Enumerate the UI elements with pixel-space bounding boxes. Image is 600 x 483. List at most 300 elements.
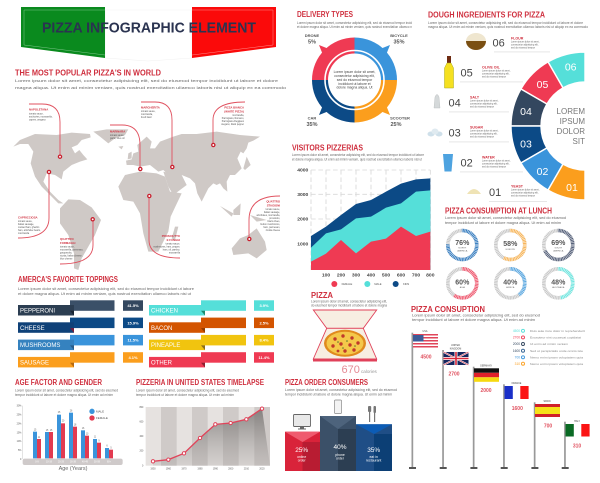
bar: other (149, 352, 274, 367)
ingredient: water: 02 (460, 158, 473, 170)
flag pole: france: FRANCE (512, 382, 522, 385)
legend (513, 329, 585, 366)
ingredient: yeast: sed do eiusmod tempor (511, 194, 535, 198)
bar chart: age: 13 (86, 433, 89, 435)
ingredient: water: consectetur adipisicing elit, (482, 162, 510, 166)
bar: sausage (18, 352, 143, 367)
line chart: timelapse: 1970 (181, 469, 187, 471)
callout: quattro formaggi: FORMAGGI (60, 241, 76, 245)
consumers text (285, 388, 397, 396)
ingredient: salt (434, 94, 509, 112)
area chart: visitors: 700 (412, 272, 420, 278)
area chart: visitors: FEMALE (342, 282, 353, 286)
consumption text (412, 314, 540, 322)
area chart: visitors: 400 (367, 272, 375, 278)
gauge: africa (496, 269, 525, 298)
gauge: australia (544, 269, 573, 298)
callout: capricciosa (18, 170, 51, 238)
ingredient: salt: Lorem ipsum dolor sit amet, (470, 100, 499, 102)
bar chart: age: 5 (110, 447, 112, 449)
bar: chicken: 3.9% (259, 303, 269, 308)
bar chart: age: 30% (17, 406, 21, 408)
ingredient: yeast: Lorem ipsum dolor sit amet, (511, 188, 540, 192)
bar: phone order (320, 416, 356, 471)
bar: bacon (149, 318, 274, 333)
ingredient: sugar: Lorem ipsum dolor sit amet, (470, 130, 499, 132)
legend: 4500 (513, 329, 520, 333)
bar: pineapple: 8.4% (259, 338, 269, 343)
label: bicycle (390, 33, 408, 46)
legend: Nemo enim ipsam voluptatem quia (530, 362, 583, 366)
bar chart: age: 15% (17, 432, 21, 434)
lunch text: tempor incididunt ut labore et dolore magna aliqua. Ut enim ad minim (445, 221, 561, 225)
callout: pizza bianca: oregano, black pepper (221, 123, 244, 126)
area chart: visitors: 1000 (297, 241, 309, 247)
flag pole: usa (409, 330, 438, 469)
ingredient: salt: consectetur adipisicing elit, (470, 102, 498, 106)
bar: chicken: CHICKEN (151, 308, 178, 314)
callout: pizza bianca: PIZZA BIANCA (224, 106, 244, 110)
bar chart: age: 18 (74, 424, 77, 426)
visitors text (292, 153, 424, 162)
callout: capricciosa: mozzarella (18, 232, 30, 235)
ingredient: olive oil (444, 56, 523, 88)
panel: consumption at lunch (445, 206, 573, 298)
donut chart: delivery (312, 38, 397, 122)
area chart: visitors: 300 (352, 272, 360, 278)
bar chart: age: 11 (38, 437, 41, 439)
pizza text: Lorem ipsum dolor sit amet, consectetur adipisicing elit, (311, 300, 387, 304)
bar: cheese: CHEESE (20, 326, 45, 332)
ingredient: sugar: sed do eiusmod tempor (470, 136, 494, 138)
bar: chicken (149, 300, 274, 316)
label: drone: 5% (308, 40, 316, 46)
bar chart: age: 10-19 (46, 462, 53, 464)
ring center text: SIT (573, 137, 585, 146)
callout: quattro stagioni: tomato sauce, (266, 208, 280, 211)
callout: capricciosa: tomato sauce, (18, 220, 33, 223)
flag pole: usa: 4500 (420, 354, 432, 360)
callout: margherita (141, 102, 174, 169)
bar chart: age: 25 (58, 412, 61, 414)
ingredient: yeast: YEAST (511, 184, 524, 188)
area chart: visitors (297, 168, 435, 287)
ingredient: olive oil: OLIVE OIL (482, 66, 501, 70)
panel: age factor and gender (15, 378, 123, 472)
calories (342, 364, 378, 376)
callout: quattro stagioni: black olives, (267, 221, 280, 223)
flag pole: spain: SPAIN (544, 400, 551, 403)
callout: capricciosa: CAPRICCIOSA (18, 216, 38, 220)
bar: online order (285, 432, 320, 471)
bar chart: age: 11 (94, 437, 97, 439)
gauge: north america: NORTH (458, 248, 467, 250)
bar: bacon: 2.5% (259, 320, 269, 325)
icon: monitor (294, 414, 310, 430)
bar: online order: online (297, 455, 306, 459)
dough text: Lorem ipsum dolor sit amet, consectetur adipisicing elit, sed do eiusmod tempor incididunt ut labore et dolore (428, 21, 583, 25)
flag pole: spain: 700 (544, 424, 552, 430)
heading: age factor: AGE FACTOR AND GENDER (15, 378, 102, 387)
callout: quattro stagioni: prosciutto, (269, 217, 280, 220)
age factor text: tempor incididunt ut labore et dolore magna aliqua. Ut enim ad minim (15, 393, 113, 397)
bar: pineapple: PINEAPLE (151, 343, 180, 349)
label: car: CAR (308, 116, 316, 120)
bar: phone order: 40% (333, 444, 347, 451)
lunch text: Lorem ipsum dolor sit amet, consectetur adipisicing elit, sed do eiusmod (445, 216, 566, 220)
toppings intro text: et dolore magna aliqua. Ut enim ad minim veniam, quis nostrud exercitation ullamco laboris nisi ut (18, 292, 191, 296)
gauge: europe: 58% (503, 241, 518, 248)
ingredient: salt: SALT (470, 96, 480, 100)
callout: napoletana (29, 104, 62, 158)
age factor text: Lorem ipsum dolor sit amet, consectetur adipisicing elit, sed do eiusmod (15, 388, 118, 392)
callout: quattro formaggi: blue cheese (60, 258, 73, 260)
line chart: timelapse: 200 (139, 451, 144, 453)
ring numbers: 01 (566, 182, 578, 194)
heading: timelapse: PIZZERIA IN UNITED STATES TIMELAPSE (136, 378, 265, 387)
callout: napoletana: tomato sauce, (29, 112, 44, 116)
ingredient: flour: consectetur adipisicing elit, (511, 44, 539, 46)
callout: quattro stagioni: ham, parmesan, (263, 226, 280, 229)
flag pole: united kingdom: UNITED (451, 344, 460, 347)
bar chart: age: 30-39 (70, 462, 77, 464)
callout: prosciutto e funghi: E FUNGHI (167, 238, 180, 242)
bar: eat in restaurant: 35% (367, 447, 380, 454)
callout: capricciosa: Italian sausage, (18, 223, 34, 226)
gauge: australia: 48% (551, 280, 566, 286)
callout: quattro formaggi: QUATTRO (60, 237, 74, 241)
line chart: timelapse: 800 (139, 407, 144, 409)
area chart: visitors: 500 (382, 272, 390, 278)
line chart: timelapse: 2000 (228, 469, 234, 471)
label: bicycle: 35% (393, 40, 405, 46)
callout: quattro formaggi: mozzarella, parmesan, (60, 248, 84, 252)
line chart: timelapse: 2020 (259, 469, 265, 471)
bar: phone order: order (336, 456, 345, 460)
bar: sausage: SAUSAGE (20, 360, 49, 366)
line chart: timelapse: 0 (142, 465, 144, 467)
flag pole: italy: 310 (573, 444, 581, 450)
heading: visitors: VISITORS PIZZERIAS (292, 144, 364, 152)
callout: pizza bianca: (WHITE PIZZA) (224, 110, 244, 114)
panel: dough ingredients (428, 10, 588, 202)
bar chart: age: 0 (20, 459, 22, 461)
gauge: australia: AUSTRALIA (552, 286, 565, 289)
area chart: visitors: 100 (322, 272, 330, 278)
bar chart: age (17, 406, 123, 465)
bar chart: age: FEMALE (96, 416, 108, 420)
callout: marinara: garlic, olive oil (110, 137, 125, 140)
calories: calories (361, 369, 378, 374)
bar chart: age: 15 (34, 430, 37, 432)
calories: 670 (342, 364, 360, 376)
callout: marinara: MARINARA (110, 130, 125, 134)
ingredient: yeast: 01 (489, 187, 501, 199)
intro text: most popular pizzas: Lorem ipsum dolor sit amet, consectetur adipisicing elit, sed do eiusmod tempor incididunt ut labore et dolore (15, 79, 278, 83)
callout: marinara (110, 125, 142, 171)
callout: quattro stagioni: STAGIONI (267, 204, 280, 208)
heading: dough: DOUGH INGREDIENTS FOR PIZZA (428, 10, 545, 20)
panel: pizza calories (311, 291, 387, 376)
callout: capricciosa: ham, artichoke hearts, (18, 229, 41, 232)
heading: pizza: PIZZA (311, 291, 333, 300)
ingredient: flour (466, 33, 550, 52)
ring center text: DOLOR (557, 127, 585, 136)
ring numbers: 02 (537, 166, 548, 178)
bar: pepperoni: 41.5% (127, 303, 139, 308)
label: bicycle: BICYCLE (390, 33, 408, 38)
bar chart: age: 15 (46, 430, 49, 432)
label: drone: DRONE (305, 33, 320, 38)
line chart: timelapse (139, 407, 270, 471)
ingredient: water (443, 154, 523, 172)
ingredient: flour: 06 (492, 38, 505, 50)
bar chart: age: MALE (96, 409, 104, 413)
ingredient: olive oil: consectetur adipisicing elit, (482, 72, 510, 76)
panel: pizza order consumers (285, 378, 397, 471)
bar: mushrooms: MUSHROOMS (20, 343, 60, 349)
area chart: visitors: 800 (426, 272, 435, 278)
bar: mushrooms (18, 335, 143, 350)
ring numbers: 05 (537, 79, 548, 91)
legend: 700 (515, 356, 520, 360)
callout: pizza bianca: Parmigiano-Reggiano (222, 120, 245, 123)
flag pole: germany (470, 364, 499, 469)
heading: lunch: PIZZA CONSUMPTION AT LUNCH (445, 206, 552, 216)
callout: quattro stagioni (248, 196, 281, 241)
area chart: visitors: 600 (397, 272, 405, 278)
axis label: age: Age (Years) (59, 466, 88, 472)
label: scooter: 25% (390, 122, 402, 128)
callout: napoletana: capers, oregano (29, 118, 46, 122)
flag pole: united kingdom (440, 344, 468, 469)
bar: sausage: 4.1% (128, 355, 138, 360)
callout: quattro formaggi: ricotta, Italian cheese, (60, 254, 83, 258)
line chart: timelapse: 600 (139, 422, 144, 424)
ingredient: yeast: consectetur adipisicing elit, (511, 192, 539, 194)
legend: Nemo enim ipsam voluptatem quia (530, 356, 583, 360)
consumers text: Lorem ipsum dolor sit amet, consectetur adipisicing elit, sed do eiusmod (285, 388, 397, 392)
bar: pineapple (149, 335, 274, 350)
bar chart: age: 9 (98, 440, 100, 442)
legend: 310 (515, 362, 520, 366)
bar: pepperoni (18, 300, 143, 316)
bar chart: age: 5% (18, 450, 21, 452)
label: scooter: SCOOTER (390, 116, 410, 120)
bar: bacon: BACON (151, 326, 172, 332)
icon: fork and knife (368, 406, 376, 422)
gauge: south america (544, 230, 573, 260)
donut chart: delivery: consectetur adipisicing elit, (334, 74, 375, 78)
lunch text (445, 216, 566, 225)
line chart: timelapse: 1960 (166, 469, 172, 471)
bar: other: 11.4% (258, 355, 270, 360)
gauge: south america: SOUTH (554, 248, 563, 250)
callout: margherita: mozzarella, (141, 113, 153, 116)
ingredient: sugar: 03 (448, 128, 461, 140)
bar: other: OTHER (151, 360, 173, 366)
ingredient: yeast (467, 184, 547, 202)
bar chart: age: 20-29 (58, 462, 65, 464)
intro text: most popular pizzas: magna aliqua. Ut enim ad minim veniam, quis nostrud exercitation ullamco laboris nisi ut aliquip ex ea commodo (15, 86, 286, 90)
gauge: africa: AFRICA (506, 286, 515, 289)
callout: prosciutto e funghi: mozzarella (169, 252, 181, 254)
timelapse text (136, 388, 239, 397)
world map (13, 129, 267, 270)
bar chart: age: 26 (70, 410, 73, 412)
pizza text (311, 300, 387, 308)
legend: Duis aute irure dolor in reprehenderit (530, 329, 585, 333)
area chart: visitors: MALE (374, 282, 382, 286)
bar: pepperoni: PEPPERONI (20, 308, 55, 314)
bar chart: age: 40-49 (82, 462, 89, 464)
gauge: south america: AMERICA (553, 250, 564, 252)
callout: margherita: tomato sauce, (141, 110, 156, 113)
legend: 1600 (513, 349, 520, 353)
label: drone (305, 33, 320, 46)
panel: toppings (18, 275, 274, 367)
ingredient: flour: Lorem ipsum dolor sit amet, (511, 40, 540, 44)
ingredient: water: sed do eiusmod tempor (482, 166, 506, 168)
gauge: africa: 40% (503, 280, 518, 286)
area chart: visitors: 2000 (297, 217, 309, 223)
panel: delivery types (297, 10, 412, 128)
bar chart: age: 20 (62, 421, 65, 423)
callout: quattro stagioni: QUATTRO (266, 200, 281, 204)
visitors text: et dolore magna aliqua. Ut enim ad minim veniam, quis nostrud exercitation ullamco laboris nisi ut (292, 158, 422, 162)
bar: mushrooms: 11.5% (127, 338, 139, 343)
flag pole: france (501, 382, 529, 469)
ingredient: olive oil: 05 (460, 68, 473, 80)
legend: Excepteur sint occaecat cupidatat (530, 336, 581, 340)
callout: quattro stagioni: artichokes, mozzarella, (256, 214, 280, 217)
callout: margherita: fresh basil (141, 116, 152, 119)
title banner (21, 7, 276, 61)
callout: prosciutto e funghi: tomato sauce, (166, 242, 180, 246)
heading: consumption: PIZZA CONSUPTION (411, 305, 485, 314)
bar chart: age: 25% (17, 415, 21, 417)
flag pole: united kingdom: KINGDOM (450, 348, 461, 350)
ring center text: IPSUM (560, 117, 585, 126)
donut chart: delivery: incididunt ut labore et (338, 82, 371, 86)
ingredient: salt: sed do eiusmod tempor (470, 106, 494, 108)
bar chart: age: 6 (106, 446, 108, 448)
area chart: visitors: 200 (337, 272, 345, 278)
bar: online order: 25% (295, 447, 308, 454)
icon: pizza box (313, 310, 377, 362)
visitors text: Lorem ipsum dolor sit amet, consectetur adipisicing elit, sed do eiusmod tempor incididunt ut labore (292, 153, 424, 157)
bar: eat in restaurant (356, 424, 392, 471)
panel: pizza consumption by country (409, 305, 590, 469)
bar: cheese (18, 318, 143, 333)
bar chart: age: 60+ (107, 462, 112, 464)
bar chart: age: 50-59 (94, 462, 101, 464)
label: scooter (390, 116, 410, 128)
legend: 2700 (513, 336, 520, 340)
toppings intro text (18, 287, 194, 296)
heading: delivery types: DELIVERY TYPES (297, 10, 354, 19)
bar chart: age: 0-9 (35, 462, 39, 464)
ring numbers: 04 (520, 106, 532, 118)
callout: prosciutto e funghi: PROSCIUTTO (162, 234, 181, 238)
label: car (306, 116, 318, 128)
title: PIZZA INFOGRAPHIC ELEMENT (42, 20, 256, 36)
gauge: asia (448, 269, 477, 298)
callout: prosciutto e funghi: mushrooms, ham, pepper, (153, 246, 180, 248)
flag pole: germany: 2000 (480, 388, 492, 394)
donut chart: delivery: dolore magna aliqua. Ut (336, 86, 373, 90)
area chart: visitors: KIDS (403, 282, 409, 286)
legend: 2000 (513, 342, 520, 346)
ingredient: sugar (428, 126, 509, 142)
heading: consumers: PIZZA ORDER CONSUMERS (285, 378, 369, 387)
ring center text (557, 107, 585, 146)
callout: pizza bianca: mozzarella, (232, 114, 244, 117)
ingredient: salt: 04 (448, 98, 461, 110)
ingredient: olive oil: Lorem ipsum dolor sit amet, (482, 70, 511, 72)
callout: prosciutto e funghi (148, 194, 181, 258)
dough text (428, 21, 588, 29)
ingredient: water: Lorem ipsum dolor sit amet, (482, 160, 511, 162)
callout: quattro formaggi: gorgonzola, (60, 252, 72, 254)
gauge: north america: 76% (455, 240, 470, 247)
bar chart: age: 20% (17, 423, 21, 425)
panel: visitors pizzerias (292, 144, 435, 287)
callout: pizza bianca: Parmigiano, Romano, (222, 117, 244, 120)
donut chart: delivery: Lorem ipsum dolor sit amet, (334, 70, 375, 74)
bar: online order: order (298, 458, 307, 462)
ring center text: LOREM (557, 107, 585, 116)
toppings intro text: Lorem ipsum dolor sit amet, consectetur adipisicing elit, sed do eiusmod tempor incididunt ut labore (18, 287, 194, 291)
flag pole: united kingdom: 2700 (448, 372, 460, 378)
flag pole: italy: ITALY (574, 420, 581, 423)
ingredient: flour: sed do eiusmod tempor (511, 46, 535, 50)
gauge: asia: ASIA (460, 286, 465, 289)
gauge: europe (496, 230, 525, 260)
bar chart: age: 15 (50, 430, 53, 432)
ingredient: olive oil: sed do eiusmod tempor (482, 76, 506, 78)
age factor text (15, 388, 118, 397)
icon: phone (334, 400, 342, 414)
ring numbers: 03 (520, 138, 532, 150)
area chart: visitors: 3000 (297, 192, 309, 198)
ingredient: flour: FLOUR (511, 36, 524, 40)
heading: most popular pizzas: THE MOST POPULAR PIZZA'S IN WORLD (15, 68, 161, 78)
consumption text: tempor incididunt ut labore et dolore magna aliqua. Ut enim ad minim (412, 318, 535, 322)
ingredient: sugar: SUGAR (470, 126, 483, 130)
line chart: timelapse: 1950 (150, 469, 156, 471)
bar: eat in restaurant: eat in (370, 455, 378, 459)
callout: napoletana: anchovies, mozzarella, (29, 116, 53, 118)
flag pole: usa: USA (423, 330, 428, 333)
ingredient: sugar: consectetur adipisicing elit, (470, 132, 498, 136)
line chart: timelapse: 400 (139, 436, 144, 438)
legend: Sed ut perspiciatis unde omnis iste (530, 349, 583, 353)
callout: margherita: MARGHERITA (141, 106, 160, 110)
gauge: north america (448, 230, 477, 260)
delivery text (297, 21, 412, 29)
timelapse text: Lorem ipsum dolor sit amet, consectetur adipisicing elit, sed do eiusmod (136, 388, 239, 392)
gauge: south america: 69% (551, 240, 566, 247)
donut chart: delivery: sed do eiusmod tempor (337, 78, 373, 82)
pizza text: do eiusmod tempor incididunt ut labore et dolore magna (311, 304, 387, 308)
line chart: timelapse: 1990 (213, 469, 219, 471)
callout: quattro stagioni: button mushrooms, (260, 223, 280, 226)
timelapse text: tempor incididunt ut labore et dolore magna aliqua. Ut enim ad minim (136, 393, 234, 397)
bar: eat in restaurant: restaurant (366, 458, 381, 462)
callout: napoletana: NAPOLETANA (29, 108, 48, 112)
bar chart: age: 16 (82, 428, 85, 430)
